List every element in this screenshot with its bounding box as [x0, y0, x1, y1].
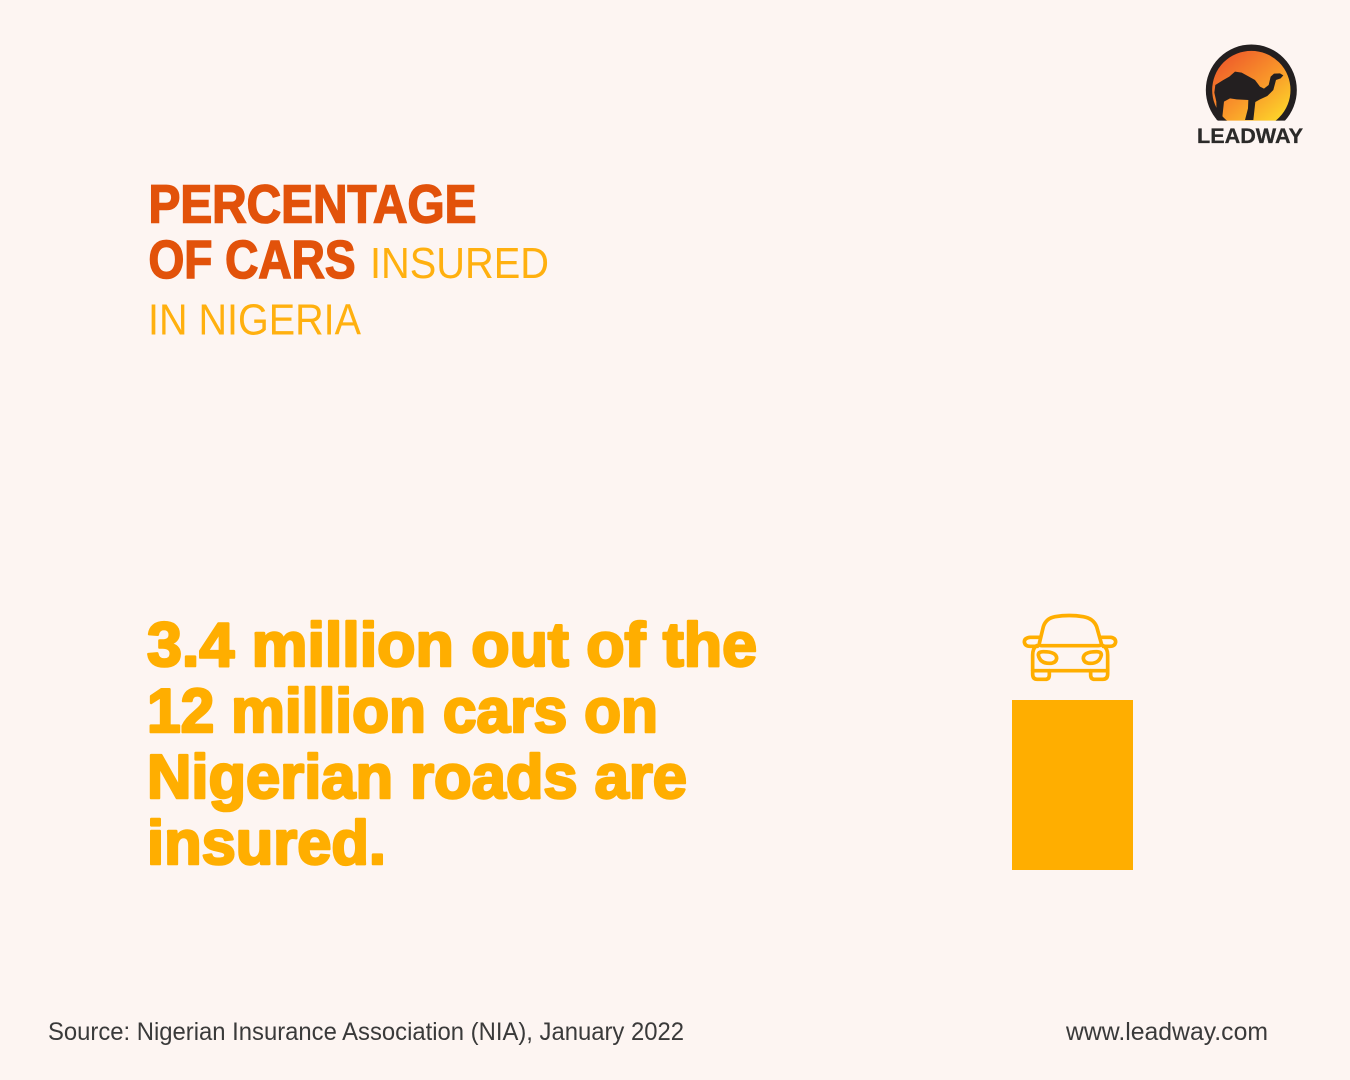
bar: insured share [1012, 700, 1133, 870]
statement line 1: 3.4 million out of the [147, 611, 757, 680]
logo wordmark: LEADWAY [1197, 125, 1303, 148]
statement line 4: insured. [147, 809, 386, 878]
logo: Leadway [1197, 48, 1303, 148]
statement line 3: Nigerian roads are [147, 743, 687, 812]
title line 3: IN NIGERIA [148, 296, 362, 344]
title line 1: PERCENTAGE [148, 174, 476, 234]
title line 2 light: INSURED [370, 239, 549, 288]
source note: Source: Nigerian Insurance Association (NIA), January 2022 [48, 1018, 684, 1046]
icon: car front view [1024, 615, 1116, 679]
statement line 2: 12 million cars on [147, 677, 658, 746]
website: www.leadway.com [1065, 1018, 1268, 1046]
title [148, 174, 549, 344]
icon: camel in sun [1209, 48, 1294, 132]
main statement [147, 611, 757, 878]
title line 2 bold: OF CARS [148, 230, 356, 290]
